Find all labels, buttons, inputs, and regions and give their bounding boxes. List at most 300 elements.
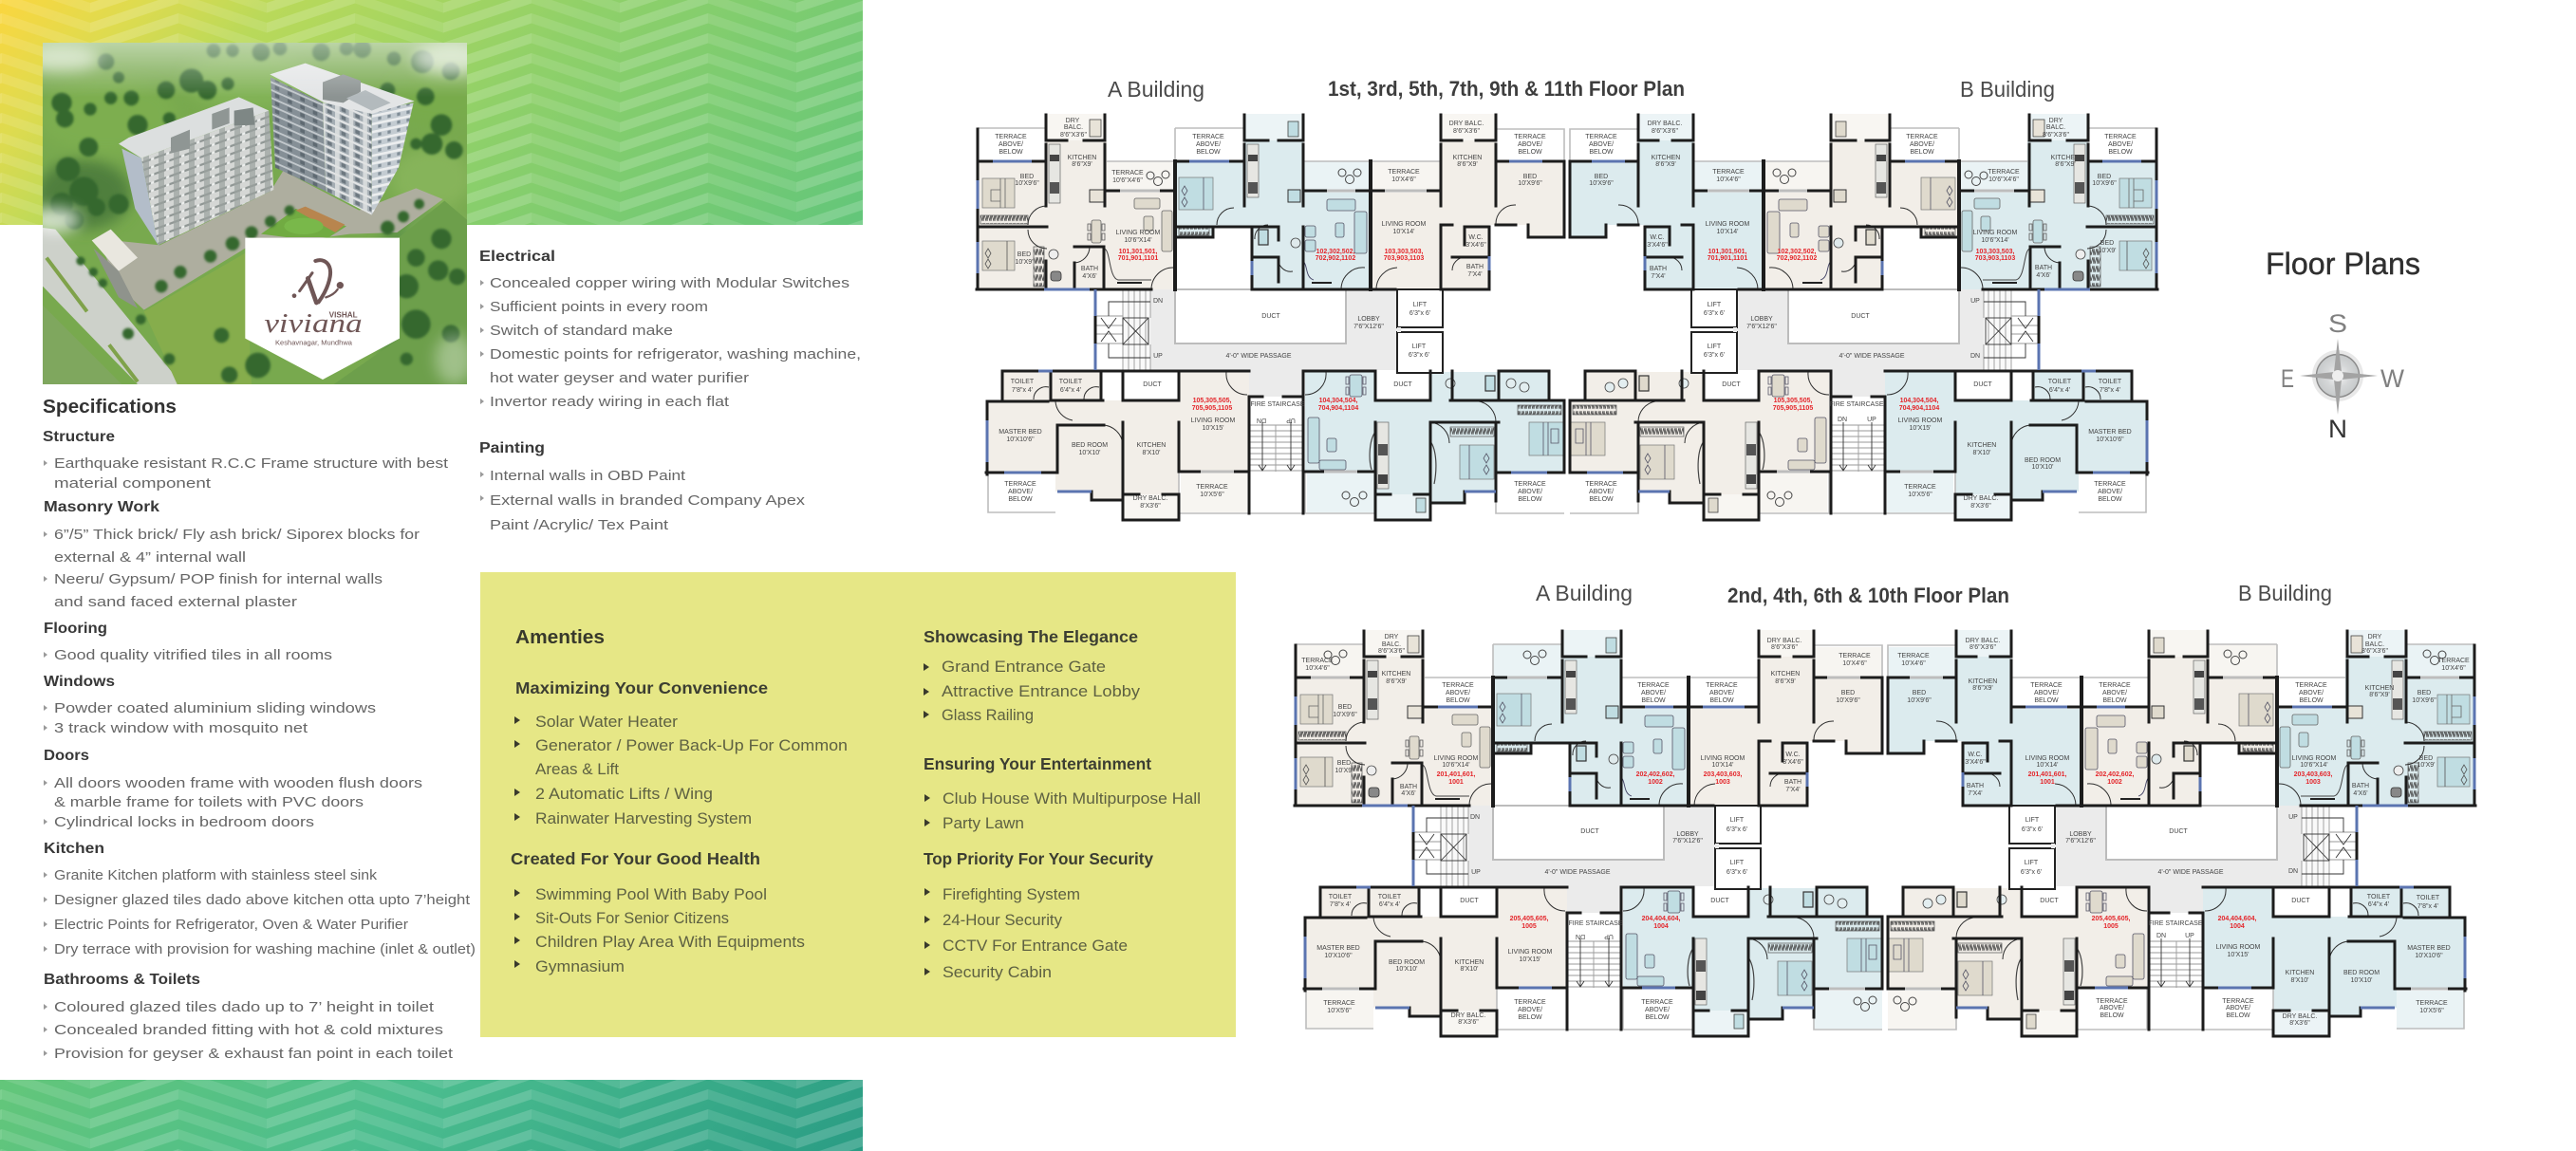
- section: flooring: Flooring: [44, 621, 107, 637]
- amenity list: created for your good health: [511, 849, 805, 975]
- room labels: A building: 10'X15': [1203, 425, 1223, 432]
- aerial photo of the buildings: [24, 40, 489, 384]
- room labels: B building: DRY: [2049, 118, 2063, 124]
- room labels: A building: 10'X10'6": [1006, 436, 1035, 443]
- room labels: A building: TERRACE: [1111, 170, 1144, 176]
- room labels: A building: FIRE STAIRCASE: [1568, 920, 1623, 927]
- heading: A Building: A Building: [1108, 77, 1204, 102]
- room labels: A building: LIFT: [1730, 860, 1745, 866]
- room labels: B building: 6'4"x 4': [2049, 387, 2070, 394]
- section: masonry work: 6”/5” Thick brick/ Fly ash brick/ Siporex blocks for: [54, 528, 420, 543]
- amenity list: ensuring your entertainment: Party Lawn: [943, 815, 1024, 832]
- specifications column: [43, 397, 476, 1062]
- amenity list: maximizing your convenience: Areas & Lift: [535, 761, 619, 778]
- room labels: B building: 204,404,604,: [2218, 916, 2256, 922]
- room labels: A building: BELOW: [1518, 1014, 1542, 1021]
- electrical and painting column: [479, 249, 861, 533]
- room labels: A building: TERRACE: [1839, 653, 1871, 659]
- room labels: B building: 10'X9': [2098, 248, 2117, 254]
- room labels: A building: BELOW: [1518, 496, 1542, 503]
- room labels: A building: ABOVE/: [1518, 489, 1542, 495]
- room labels: B building: LIFT: [1708, 302, 1722, 308]
- amenity list: maximizing your convenience: 2 Automatic Lifts / Wing: [535, 786, 713, 803]
- section: doors: [44, 748, 422, 830]
- room labels: A building: UP: [1604, 933, 1614, 939]
- room labels: A building: DN: [1153, 298, 1163, 305]
- room labels: A building: TERRACE: [1706, 682, 1738, 689]
- road and verge: [43, 228, 182, 384]
- room labels: B building: DN: [1838, 417, 1847, 423]
- room labels: A building: BELOW: [1008, 496, 1033, 503]
- room labels: B building: TERRACE: [2099, 682, 2131, 689]
- room labels: A building: UP: [1153, 353, 1163, 360]
- amenity list: maximizing your convenience: Solar Water Heater: [535, 714, 679, 731]
- room labels: B building: DUCT: [2040, 898, 2059, 904]
- heading: B Building: B Building: [2238, 581, 2332, 605]
- room labels: B building: 6'3"x 6': [2022, 826, 2043, 833]
- section: masonry work: Masonry Work: [44, 499, 159, 515]
- room labels: B building: TERRACE: [1906, 134, 1938, 140]
- amenity list: maximizing your convenience: Rainwater Harvesting System: [535, 810, 752, 827]
- room labels: A building: TERRACE: [1301, 658, 1334, 664]
- room labels: A building: KITCHEN: [1455, 959, 1484, 966]
- amenity list: created for your good health: Children Play Area With Equipments: [535, 934, 805, 951]
- room labels: B building: W.C.: [1968, 752, 1983, 758]
- room labels: B building: TERRACE: [2030, 682, 2063, 689]
- room labels: A building: DUCT: [1580, 828, 1599, 835]
- room labels: B building: 1005: [2103, 923, 2119, 930]
- room labels: B building: DN: [2156, 933, 2166, 939]
- room labels: A building: 6'3"x 6': [1727, 826, 1747, 833]
- room labels: B building: 202,402,602,: [2096, 771, 2134, 778]
- room labels: B building: LIVING ROOM: [1898, 418, 1942, 424]
- room labels: A building: LIVING ROOM: [1382, 221, 1426, 228]
- room labels: B building: 8'6"X9': [2055, 161, 2076, 168]
- room labels: A building: 10'X4'6": [1305, 665, 1330, 672]
- room labels: B building: 4'-0" WIDE PASSAGE: [2157, 869, 2224, 876]
- room labels: B building: 7'8"x 4': [2417, 903, 2438, 910]
- section: masonry work: [44, 499, 420, 610]
- room labels: B building: 8'6"X9': [1655, 161, 1676, 168]
- room labels: B building: 7'X4': [1968, 790, 1983, 797]
- room labels: A building: W.C.: [1785, 752, 1801, 758]
- room labels: A building: LIFT: [1730, 817, 1745, 824]
- floor plan: 2nd 4th 6th and 10th floors: [1295, 581, 2475, 1036]
- room labels: A building: TERRACE: [1641, 999, 1673, 1006]
- room labels: A building: 104,304,504,: [1319, 398, 1357, 404]
- room labels: B building: DUCT: [2169, 828, 2188, 835]
- room labels: B building: BED: [2098, 174, 2111, 180]
- room labels: A building: DN: [1576, 933, 1585, 939]
- room labels: B building: 8'X3'6": [2289, 1020, 2310, 1027]
- room labels: A building: DUCT: [1393, 381, 1412, 388]
- logo wordmark: VISHAL: [329, 310, 358, 319]
- room labels: B building: 7'6"X12'6": [1746, 324, 1777, 330]
- room labels: B building: 3'X4'6": [1965, 759, 1986, 766]
- section: electrical: Electrical: [479, 249, 555, 265]
- room labels: B building: LIVING ROOM: [2025, 755, 2069, 762]
- room labels: A building: 8'6"X3'6": [1060, 132, 1087, 139]
- section: structure: [43, 429, 448, 492]
- room labels: B building: 10'X10': [2351, 977, 2372, 984]
- section: kitchen: [44, 841, 476, 957]
- section: electrical: Sufficient points in every room: [490, 300, 708, 315]
- room labels: B building: DRY BALC.: [1648, 121, 1682, 127]
- room labels: B building: TOILET: [2099, 379, 2122, 385]
- room labels: A building: TERRACE: [1192, 134, 1224, 140]
- room labels: A building: 10'X4'6": [1391, 176, 1416, 183]
- room labels: A building: [1301, 634, 1932, 1026]
- room labels: B building: ABOVE/: [1589, 489, 1614, 495]
- room labels: A building: DN: [1470, 814, 1480, 821]
- room labels: A building: 202,402,602,: [1636, 771, 1674, 778]
- room labels: A building: BED: [1523, 174, 1537, 180]
- room labels: A building: 205,405,605,: [1510, 916, 1548, 922]
- room labels: B building: KITCHEN: [1652, 155, 1680, 161]
- room labels: A building: 7'8"x 4': [1012, 387, 1033, 394]
- corner haze: [24, 43, 489, 384]
- room labels: B building: 6'4"x 4': [2368, 901, 2389, 908]
- room labels: B building: BALC.: [2046, 124, 2065, 131]
- room labels: A building: 3'X4'6": [1465, 242, 1486, 249]
- room labels: A building: BED ROOM: [1072, 442, 1108, 449]
- room labels: A building: TERRACE: [1514, 999, 1546, 1006]
- heading: Floor Plans: Floor Plans: [2266, 247, 2420, 281]
- room labels: A building: LIVING ROOM: [1701, 755, 1745, 762]
- room labels: A building: 10'X5'6": [1327, 1008, 1352, 1014]
- room labels: A building: LIFT: [1413, 302, 1428, 308]
- room labels: B building: UP: [1867, 417, 1876, 423]
- room labels: A building: 101,301,501,: [1119, 249, 1157, 255]
- room labels: B building: TERRACE: [2096, 998, 2128, 1005]
- room labels: A building: 3'X4'6": [1783, 759, 1803, 766]
- room labels: A building: TOILET: [1059, 379, 1083, 385]
- section: electrical: hot water geyser and water purifier: [490, 371, 749, 386]
- amenity list: maximizing your convenience: [514, 678, 848, 827]
- room labels: A building: 7'8"x 4': [1330, 901, 1351, 908]
- room labels: B building: TERRACE: [1585, 134, 1617, 140]
- compass: S: [2328, 309, 2347, 338]
- compass: W: [2380, 364, 2405, 393]
- room labels: B building: 4'-0" WIDE PASSAGE: [1839, 353, 1905, 360]
- room labels: A building: BELOW: [1709, 697, 1734, 704]
- section: structure: Earthquake resistant R.C.C Frame structure with best: [54, 456, 448, 472]
- amenity list: top priority for your security: Firefighting System: [943, 886, 1080, 903]
- section: doors: Doors: [44, 748, 89, 764]
- room labels: B building: BELOW: [2100, 1012, 2124, 1019]
- room labels: A building: BELOW: [999, 149, 1023, 156]
- room labels: B building: TOILET: [2048, 379, 2072, 385]
- building A: [119, 97, 273, 245]
- room labels: B building: BELOW: [1589, 496, 1614, 503]
- room labels: A building: BATH: [1784, 779, 1801, 786]
- room labels: A building: 8'X10': [1460, 966, 1479, 973]
- room labels: B building: LIFT: [2025, 817, 2040, 824]
- room labels: B building: 10'X9'6": [2092, 180, 2117, 187]
- room labels: B building: LIFT: [1708, 343, 1722, 350]
- room labels: A building: ABOVE/: [999, 141, 1023, 148]
- room labels: A building: KITCHEN: [1453, 155, 1482, 161]
- section: electrical: Domestic points for refrigerator, washing machine,: [490, 347, 861, 362]
- room labels: B building: DRY BALC.: [2283, 1013, 2317, 1020]
- room labels: A building: DRY BALC.: [1133, 495, 1167, 502]
- room labels: B building: 6'3"x 6': [1704, 352, 1725, 359]
- floor plan: 1st 3rd 5th 7th 9th and 11th floors: [977, 77, 2157, 520]
- room labels: B building: LIVING ROOM: [1706, 221, 1749, 228]
- room labels: A building: BALC.: [1064, 124, 1083, 131]
- room labels: A building: FIRE STAIRCASE: [1250, 401, 1305, 408]
- room labels: A building: 10'6"X14': [1442, 762, 1470, 769]
- room labels: B building: 1001: [2040, 779, 2055, 786]
- amenity list: top priority for your security: [924, 849, 1153, 981]
- room labels: B building: TERRACE: [2437, 658, 2470, 664]
- section: flooring: [44, 621, 332, 663]
- section: bathrooms and toilets: Bathrooms & Toilets: [44, 972, 200, 988]
- compound paving: [98, 171, 443, 310]
- room labels: A building: ABOVE/: [1196, 141, 1221, 148]
- room labels: A building: 103,303,503,: [1385, 249, 1423, 255]
- room labels: A building: 7'6"X12'6": [1672, 838, 1703, 845]
- room labels: B building: ABOVE/: [2102, 690, 2127, 696]
- plan drawing: B building: [1570, 114, 2157, 520]
- section: electrical: Switch of standard make: [490, 324, 673, 339]
- room labels: B building: 10'X5'6": [2419, 1008, 2444, 1014]
- room labels: B building: 10'X10'6": [2096, 436, 2124, 443]
- section: windows: 3 track window with mosquito net: [54, 721, 308, 736]
- room labels: A building: BATH: [1081, 266, 1098, 272]
- room labels: B building: 8'6"X3'6": [1652, 128, 1678, 135]
- room labels: B building: DN: [1970, 353, 1980, 360]
- section: windows: Powder coated aluminium sliding windows: [54, 701, 376, 716]
- compass: [2281, 309, 2405, 443]
- room labels: A building: 8'6"X9': [1072, 161, 1092, 168]
- room labels: A building: 10'X9'6": [1836, 697, 1860, 704]
- amenity list: showcasing the elegance: Glass Railing: [942, 707, 1034, 724]
- room labels: A building: 702,902,1102: [1316, 255, 1355, 262]
- compass: E: [2281, 364, 2294, 393]
- room labels: A building: DUCT: [1460, 898, 1479, 904]
- heading: B Building: B Building: [1960, 77, 2055, 102]
- room labels: B building: BELOW: [2102, 697, 2127, 704]
- room labels: B building: 6'3"x 6': [1704, 310, 1725, 317]
- room labels: A building: UP: [1471, 869, 1481, 876]
- room labels: A building: 1003: [1715, 779, 1730, 786]
- room labels: A building: TOILET: [1378, 894, 1402, 900]
- room labels: B building: 7'8"x 4': [2100, 387, 2120, 394]
- room labels: A building: ABOVE/: [1709, 690, 1734, 696]
- room labels: A building: BED ROOM: [1389, 959, 1425, 966]
- room labels: A building: 1005: [1521, 923, 1537, 930]
- room labels: B building: 8'X3'6": [1970, 503, 1991, 510]
- room labels: B building: 203,403,603,: [2294, 771, 2332, 778]
- room labels: B building: ABOVE/: [2034, 690, 2059, 696]
- room labels: A building: UP: [1286, 417, 1296, 423]
- room labels: A building: LIFT: [1412, 343, 1427, 350]
- section: kitchen: Dry terrace with provision for washing machine (inlet & outlet): [54, 942, 476, 957]
- amenity list: showcasing the elegance: Showcasing The Elegance: [924, 627, 1138, 646]
- heading: A Building: A Building: [1536, 581, 1633, 605]
- room labels: B building: LIVING ROOM: [2216, 944, 2260, 951]
- amenity list: ensuring your entertainment: Ensuring Your Entertainment: [924, 754, 1151, 773]
- room labels: B building: BELOW: [1589, 149, 1614, 156]
- room labels: B building: BATH: [2352, 783, 2369, 789]
- room labels: B building: 4'X6': [2036, 272, 2051, 279]
- room labels: B building: 10'X15': [2228, 952, 2249, 958]
- room labels: A building: 10'X14': [1712, 762, 1733, 769]
- section: bathrooms and toilets: [44, 972, 453, 1062]
- room labels: B building: BALC.: [2365, 641, 2384, 648]
- room labels: B building: LIVING ROOM: [1973, 230, 2017, 236]
- room labels: A building: 8'6"X9': [1457, 161, 1478, 168]
- room labels: A building: 6'3"x 6': [1727, 869, 1747, 876]
- room labels: A building: DUCT: [1710, 898, 1729, 904]
- room labels: B building: 1004: [2230, 923, 2245, 930]
- room labels: B building: 701,901,1101: [1708, 255, 1747, 262]
- garden: [261, 209, 346, 237]
- room labels: A building: 6'3"x 6': [1409, 352, 1429, 359]
- section: electrical: Invertor ready wiring in each flat: [490, 395, 729, 410]
- room labels: B building: DUCT: [1973, 381, 1992, 388]
- room labels: B building: 705,905,1105: [1773, 405, 1813, 412]
- room labels: B building: BELOW: [2108, 149, 2133, 156]
- room labels: B building: 10'X4'6": [2441, 665, 2466, 672]
- room labels: A building: DN: [1257, 417, 1266, 423]
- room labels: B building: 8'6"X3'6": [2361, 648, 2388, 655]
- room labels: A building: 10'X4'6": [1842, 660, 1867, 667]
- room labels: A building: [995, 118, 1546, 510]
- room labels: B building: 702,902,1102: [1777, 255, 1817, 262]
- room labels: A building: 10'X9'6": [1907, 697, 1932, 704]
- panel: amenities: [480, 572, 1236, 1037]
- section: masonry work: external & 4” internal wall: [54, 550, 246, 566]
- room labels: B building: W.C.: [1650, 234, 1665, 241]
- room labels: A building: KITCHEN: [1771, 671, 1800, 678]
- room labels: B building: LIVING ROOM: [2292, 755, 2336, 762]
- section: masonry work: Neeru/ Gypsum/ POP finish for internal walls: [54, 572, 383, 587]
- bottom chevron band: [0, 1080, 863, 1151]
- room labels: A building: 10'6"X14': [1124, 237, 1152, 244]
- room labels: A building: MASTER BED: [999, 429, 1042, 436]
- room labels: A building: ABOVE/: [1446, 690, 1470, 696]
- room labels: A building: DRY BALC.: [1767, 638, 1801, 644]
- room labels: B building: KITCHEN: [2286, 970, 2314, 976]
- room labels: B building: 8'6"X9': [1972, 685, 1993, 692]
- room labels: B building: 201,401,601,: [2028, 771, 2066, 778]
- room labels: A building: 4'X6': [1082, 273, 1097, 280]
- room labels: A building: TERRACE: [1388, 169, 1420, 176]
- room labels: A building: 10'X9'6": [1015, 180, 1039, 187]
- room labels: B building: DRY BALC.: [1964, 495, 1998, 502]
- amenity list: ensuring your entertainment: Club House With Multipurpose Hall: [943, 790, 1201, 808]
- room labels: A building: TERRACE: [1196, 484, 1228, 491]
- room labels: A building: BELOW: [1446, 697, 1470, 704]
- room labels: B building: ABOVE/: [1910, 141, 1934, 148]
- room labels: B building: TERRACE: [2416, 1000, 2448, 1007]
- section: windows: [44, 674, 376, 736]
- room labels: A building: 203,403,603,: [1704, 771, 1742, 778]
- room labels: A building: TERRACE: [1637, 682, 1670, 689]
- room labels: B building: BED: [2417, 690, 2431, 696]
- room labels: A building: 6'4"x 4': [1060, 387, 1081, 394]
- room labels: B building: TERRACE: [2104, 134, 2137, 140]
- room labels: B building: 10'X5'6": [1908, 492, 1932, 498]
- room labels: A building: TERRACE: [995, 134, 1027, 140]
- room labels: B building: DN: [2288, 868, 2298, 875]
- room labels: B building: LOBBY: [1750, 316, 1773, 323]
- room labels: B building: 1002: [2107, 779, 2122, 786]
- room labels: B building: TERRACE: [1904, 484, 1936, 491]
- room labels: A building: DRY BALC.: [1449, 121, 1484, 127]
- room labels: A building: W.C.: [1468, 234, 1484, 241]
- room labels: A building: 10'X10'6": [1324, 953, 1353, 959]
- room labels: B building: FIRE STAIRCASE: [1829, 401, 1884, 408]
- room labels: A building: LIVING ROOM: [1508, 949, 1552, 956]
- section: kitchen: Kitchen: [44, 841, 104, 857]
- room labels: A building: KITCHEN: [1382, 671, 1410, 678]
- section: painting: Internal walls in OBD Paint: [490, 469, 685, 484]
- room labels: B building: TERRACE: [1988, 169, 2020, 176]
- room labels: B building: 102,302,502,: [1778, 249, 1816, 255]
- room labels: B building: 10'6"X4'6": [1988, 176, 2019, 183]
- room labels: A building: TERRACE: [1514, 134, 1546, 140]
- room labels: B building: BED: [2100, 240, 2114, 247]
- room labels: A building: BALC.: [1382, 641, 1401, 648]
- room labels: B building: 6'3"x 6': [2021, 869, 2042, 876]
- room labels: B building: 703,903,1103: [1975, 255, 2015, 262]
- section: painting: Paint /Acrylic/ Tex Paint: [490, 518, 668, 533]
- room labels: A building: LOBBY: [1676, 831, 1699, 838]
- section: electrical: Concealed copper wiring with Modular Switches: [490, 276, 849, 291]
- room labels: B building: 8'6"X3'6": [2043, 132, 2069, 139]
- room labels: A building: LOBBY: [1357, 316, 1380, 323]
- room labels: A building: LIVING ROOM: [1434, 755, 1478, 762]
- room labels: A building: BED: [1017, 251, 1031, 258]
- room labels: A building: BELOW: [1518, 149, 1542, 156]
- room labels: B building: ABOVE/: [2100, 1005, 2124, 1012]
- room labels: B building: BELOW: [2299, 697, 2324, 704]
- room labels: A building: 10'X15': [1520, 956, 1540, 963]
- room labels: B building: 7'6"X12'6": [2065, 838, 2096, 845]
- room labels: A building: 8'6"X3'6": [1453, 128, 1480, 135]
- section: kitchen: Granite Kitchen platform with stainless steel sink: [54, 868, 378, 883]
- room labels: A building: ABOVE/: [1645, 1007, 1670, 1013]
- room labels: A building: 1002: [1648, 779, 1663, 786]
- room labels: B building: 8'6"X9': [2369, 692, 2390, 698]
- room labels: A building: 10'X9': [1015, 259, 1034, 266]
- section: bathrooms and toilets: Provision for geyser & exhaust fan point in each toilet: [54, 1047, 453, 1062]
- room labels: B building: BELOW: [2226, 1012, 2250, 1019]
- room labels: A building: BED: [1020, 174, 1034, 180]
- compass: N: [2328, 415, 2347, 443]
- room labels: A building: 10'X14': [1393, 229, 1414, 235]
- room labels: A building: BELOW: [1645, 1014, 1670, 1021]
- room labels: A building: BED: [1841, 690, 1855, 696]
- room labels: A building: BED: [1338, 704, 1352, 711]
- room labels: A building: BATH: [1400, 784, 1417, 790]
- logo wordmark: viviana: [264, 309, 363, 339]
- section: structure: material component: [54, 476, 211, 492]
- room labels: B building: [1965, 634, 2470, 1027]
- room labels: B building: 10'X15': [1910, 425, 1931, 432]
- room labels: B building: DRY BALC.: [1966, 638, 2000, 644]
- lawn beside badge: [144, 253, 252, 384]
- room labels: A building: 8'6"X3'6": [1771, 644, 1798, 651]
- logo mark: [292, 260, 344, 303]
- amenity list: maximizing your convenience: Generator / Power Back-Up For Common: [535, 737, 848, 754]
- room labels: A building: BED: [1913, 690, 1926, 696]
- room labels: B building: [1585, 118, 2137, 510]
- room labels: B building: 104,304,504,: [1900, 398, 1938, 404]
